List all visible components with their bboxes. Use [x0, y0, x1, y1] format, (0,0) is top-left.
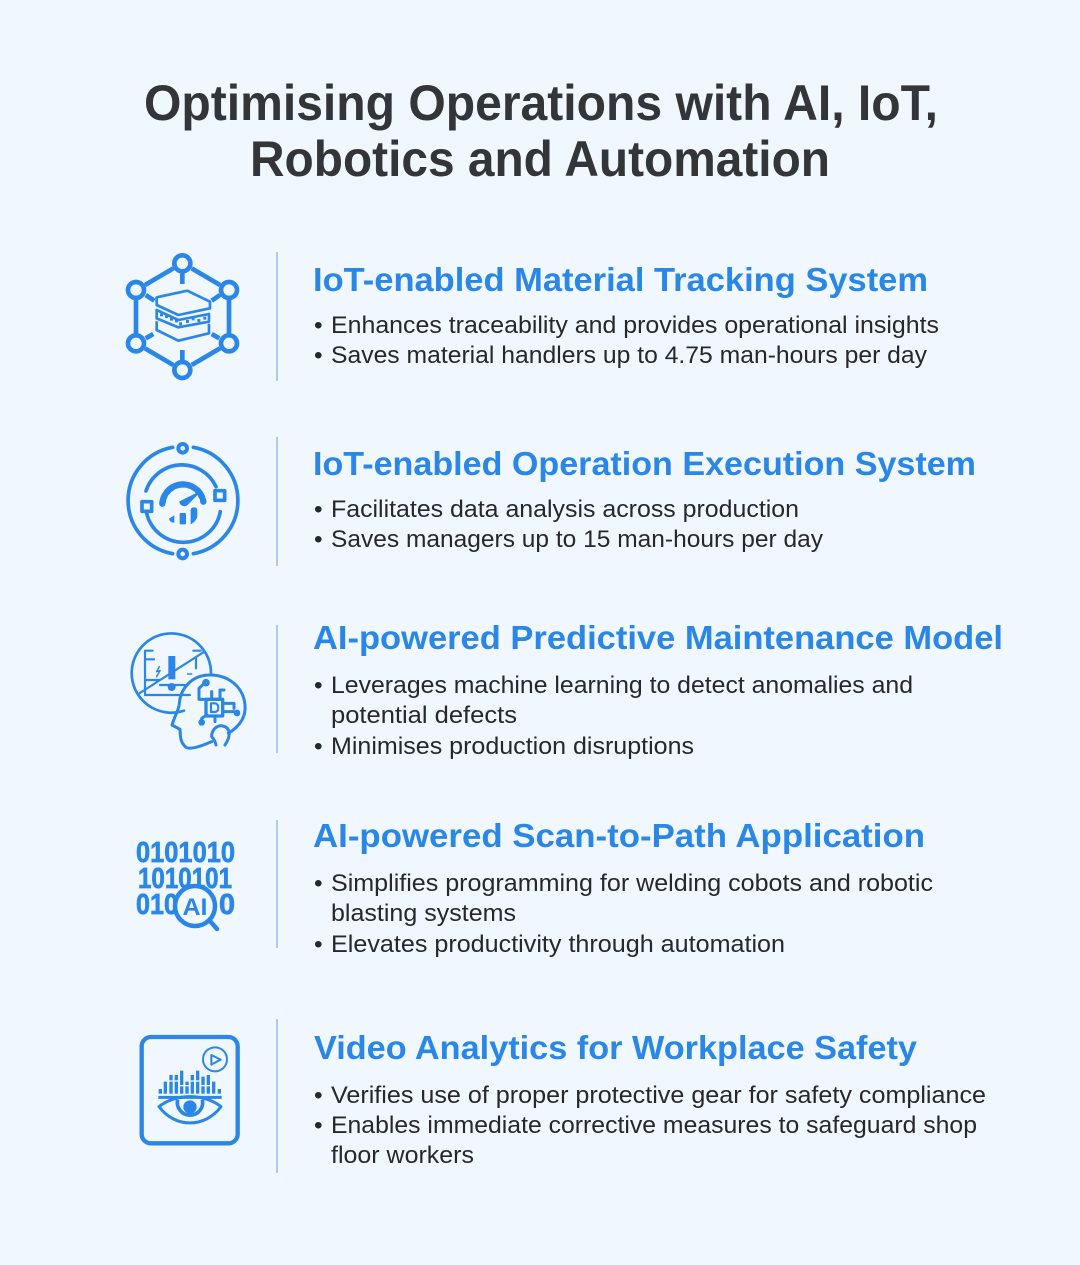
- title: Optimising Operations with AI, IoT,: [144, 75, 938, 131]
- bullet list: Minimises production disruptions: [331, 733, 694, 760]
- bullet list: •: [314, 1082, 323, 1109]
- bullet list: Enables immediate corrective measures to safeguard shop: [331, 1112, 977, 1139]
- bullet list: •: [314, 931, 323, 958]
- bullet list: floor workers: [331, 1142, 474, 1169]
- bullet list: [314, 1082, 986, 1169]
- bullet list: Facilitates data analysis across production: [331, 496, 799, 523]
- heading: AI-powered Predictive Maintenance Model: [313, 619, 1003, 656]
- icon: video eye analytics: [142, 1037, 238, 1143]
- bullet list: Leverages machine learning to detect anomalies and: [331, 672, 913, 699]
- panel: IoT-enabled Operation Execution System: [128, 437, 976, 566]
- bullet list: •: [314, 870, 323, 897]
- icon: binary code with AI magnifier: 0101010: [136, 837, 235, 869]
- divider: [276, 252, 278, 381]
- bullet list: Elevates productivity through automation: [331, 931, 785, 958]
- heading: AI-powered Scan-to-Path Application: [313, 817, 925, 854]
- divider: [276, 437, 278, 566]
- bullet list: •: [314, 1112, 323, 1139]
- bullet list: •: [314, 342, 323, 369]
- bullet list: Verifies use of proper protective gear for safety compliance: [331, 1082, 986, 1109]
- icon: binary code with AI magnifier: 0: [219, 889, 235, 921]
- bullet list: •: [314, 733, 323, 760]
- bullet list: Enhances traceability and provides operational insights: [331, 312, 939, 339]
- icon: head with chip and defect warning: [132, 633, 245, 748]
- bullet list: Simplifies programming for welding cobots and robotic: [331, 870, 933, 897]
- panel: AI-powered Scan-to-Path Application: [136, 817, 933, 958]
- title: [144, 75, 938, 187]
- bullet list: [314, 496, 824, 553]
- title: Robotics and Automation: [250, 131, 830, 187]
- bullet list: [314, 870, 933, 958]
- panel: AI-powered Predictive Maintenance Model: [132, 619, 1003, 760]
- divider: [276, 820, 278, 948]
- bullet list: •: [314, 496, 323, 523]
- icon: binary code with AI magnifier: 1010101: [138, 863, 232, 895]
- bullet list: blasting systems: [331, 900, 516, 927]
- bullet list: •: [314, 526, 323, 553]
- icon: material layers network: [128, 255, 237, 378]
- bullet list: •: [314, 312, 323, 339]
- panel: IoT-enabled Material Tracking System: [128, 252, 939, 381]
- panel: Video Analytics for Workplace Safety: [142, 1019, 986, 1173]
- bullet list: Saves material handlers up to 4.75 man-hours per day: [331, 342, 928, 369]
- icon: binary code with AI magnifier: 010: [136, 889, 178, 921]
- icon: binary code with AI magnifier: AI: [182, 894, 208, 921]
- bullet list: •: [314, 672, 323, 699]
- divider: [276, 1019, 278, 1173]
- divider: [276, 625, 278, 753]
- bullet list: [314, 312, 939, 369]
- icon: binary code with AI magnifier: [136, 837, 235, 929]
- heading: IoT-enabled Material Tracking System: [313, 261, 928, 298]
- heading: IoT-enabled Operation Execution System: [313, 445, 976, 482]
- bullet list: Saves managers up to 15 man-hours per day: [331, 526, 824, 553]
- bullet list: [314, 672, 913, 760]
- heading: Video Analytics for Workplace Safety: [314, 1029, 918, 1066]
- icon: gauge dial: [128, 444, 238, 558]
- bullet list: potential defects: [331, 702, 517, 729]
